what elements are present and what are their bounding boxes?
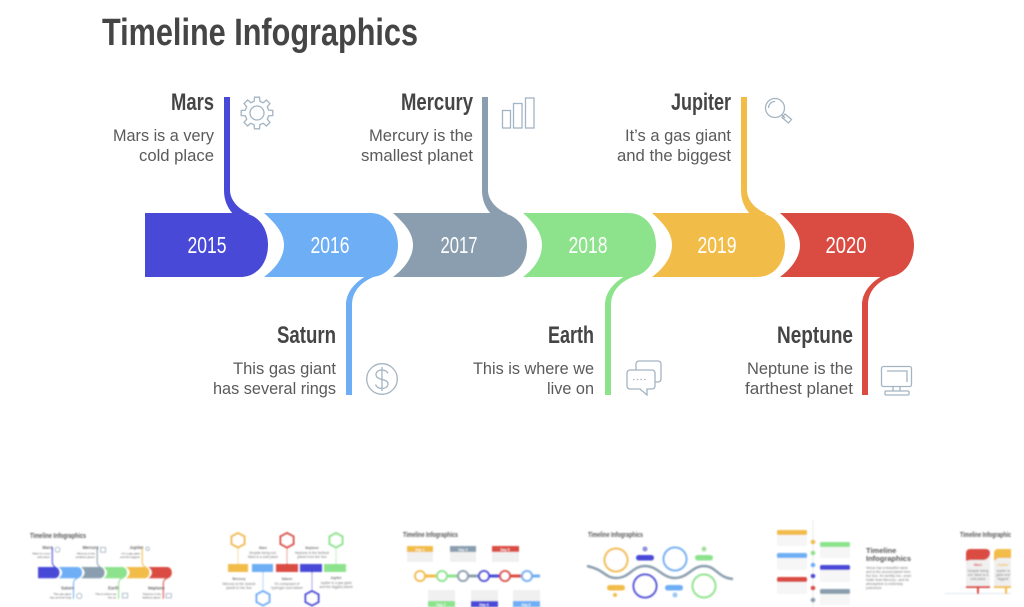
thumbnail 6 baseline	[945, 592, 1011, 594]
thumbnail 2 labels: Saturn	[282, 577, 292, 581]
icon: magnifier	[766, 98, 792, 123]
thumbnail 3 title: Timeline Infographics	[403, 530, 458, 539]
thumbnail 4: wave timeline	[587, 530, 733, 598]
thumbnail 4 title: Timeline Infographics	[588, 530, 643, 539]
thumbnail 2 labels: Mercury	[232, 577, 246, 581]
milestone: Neptune: Neptune	[777, 322, 853, 349]
thumbnail 3 day labels: Day 1	[415, 548, 425, 552]
thumbnail 1 ribbon: Neptune	[148, 586, 165, 591]
thumbnail 5 text: Infographics	[866, 554, 911, 563]
milestone: Mars: cold place	[139, 147, 214, 165]
milestone: Saturn: This gas giant	[233, 360, 336, 378]
segment 2017: 2017	[440, 232, 478, 258]
thumbnail 4 circles	[604, 548, 716, 598]
milestone: Earth	[473, 276, 661, 398]
thumbnail 5 text: Timeline	[866, 546, 896, 555]
thumbnail 1 ribbon	[32, 545, 172, 600]
thumbnail 3 day labels	[407, 546, 540, 607]
milestone: Neptune: farthest planet	[745, 380, 853, 398]
thumbnail 1 ribbon: smallest planet	[76, 555, 95, 559]
thumbnail 6 red card: cold place	[970, 577, 986, 581]
milestone: Mars	[113, 89, 273, 214]
thumbnail 1 ribbon: Mercury is the	[77, 552, 95, 556]
thumbnail 3 day labels: Day 6	[521, 603, 531, 607]
thumbnail 5 text: the Sun. It’s terribly hot—even	[866, 574, 911, 578]
thumbnail 3 day labels: Day 5	[500, 548, 510, 552]
thumbnail 6 red card	[966, 549, 990, 594]
thumbnail strip	[30, 520, 1011, 607]
thumbnail 2 labels: and the biggest planet	[319, 585, 353, 589]
thumbnail 1 ribbon: It’s a gas giant	[122, 552, 140, 556]
thumbnail 1 ribbon: Neptune is the	[143, 592, 162, 596]
thumbnail 2 labels: Neptune is the farthest	[295, 551, 329, 555]
thumbnail 1 ribbon: Mars is a very	[32, 552, 51, 556]
milestone: Neptune: Neptune is the	[747, 360, 853, 378]
icon: monitor	[882, 366, 912, 395]
thumbnail 3: day timeline	[403, 530, 540, 607]
thumbnail 5 cards	[777, 530, 850, 605]
thumbnail 2 labels: planet from the Sun	[297, 555, 327, 559]
timeline ribbon	[145, 213, 914, 277]
milestone: Mars: Mars	[171, 89, 214, 116]
thumbnail 6 red card: Mars	[974, 563, 982, 567]
segment 2017	[393, 213, 527, 277]
thumbnail 1 ribbon: Mars	[43, 545, 53, 550]
thumbnail 6 yellow card: biggest	[998, 577, 1009, 581]
milestone: Mars: Mars is a very	[113, 127, 215, 145]
segment 2016	[264, 213, 398, 277]
icon: gear	[241, 97, 273, 129]
thumbnail 1 title: Timeline Infographics	[30, 531, 86, 540]
thumbnail 2 labels: Mercury is the closest	[223, 582, 255, 586]
thumbnail 1 ribbon: Mercury	[83, 545, 99, 550]
thumbnail 2 labels	[223, 546, 353, 590]
thumbnail 5 text	[866, 546, 911, 590]
thumbnail 1 ribbon: has several rings	[50, 596, 72, 600]
thumbnail 2 labels: Neptune	[305, 546, 319, 550]
thumbnail 1 ribbon: Saturn	[61, 586, 75, 591]
thumbnail 5 text: poisonous	[866, 586, 882, 590]
milestone: Neptune	[745, 276, 912, 398]
milestone: Mercury: smallest planet	[361, 147, 473, 165]
thumbnail 5 axis	[812, 520, 814, 607]
thumbnail 1 ribbon: This gas giant	[53, 592, 71, 596]
thumbnail 2 year bars	[228, 564, 346, 572]
thumbnail 6 yellow card: Jupiter is	[996, 569, 1010, 573]
milestone: Mercury: Mercury is the	[369, 127, 473, 145]
thumbnail 2 connectors	[238, 547, 336, 591]
thumbnail 1 ribbon: Jupiter	[130, 545, 144, 550]
thumbnail 4 weeks	[607, 546, 713, 598]
thumbnail 2 labels: Jupiter is a gas giant	[320, 581, 352, 585]
thumbnail 1 ribbon: Earth	[108, 586, 119, 591]
thumbnail 2: hexagon timeline	[223, 533, 353, 606]
thumbnail 6 yellow card: giant and	[996, 573, 1010, 577]
segment 2019: 2019	[698, 232, 736, 258]
milestone: Saturn	[213, 276, 397, 398]
thumbnail 2 labels: Mars	[259, 546, 267, 550]
milestone: Mercury: Mercury	[401, 89, 474, 116]
thumbnail 1 ribbon: farthest planet	[142, 596, 161, 600]
thumbnail 2 labels: Despite being red,	[249, 551, 277, 555]
milestone: Earth: Earth	[548, 322, 594, 349]
thumbnail 5: vertical timeline	[777, 520, 911, 607]
thumbnail 1 ribbon: and the biggest	[120, 555, 140, 559]
thumbnail 4 wave	[587, 566, 733, 579]
thumbnail 2 labels: planet to the Sun	[226, 586, 252, 590]
thumbnail 5 text: hotter than Mercury—and its	[866, 578, 909, 582]
thumbnail 1: ribbon timeline	[30, 531, 172, 600]
thumbnail 6: cards timeline	[945, 530, 1011, 594]
milestone: Mercury	[361, 89, 534, 214]
title: Timeline Infographics	[102, 12, 418, 54]
segment 2020: 2020	[826, 232, 866, 258]
thumbnail 3 day labels: Day 4	[479, 603, 489, 607]
segment 2018: 2018	[568, 232, 608, 258]
thumbnail 1 ribbon: This is where we	[95, 592, 117, 596]
icon: chat bubbles	[627, 361, 661, 395]
milestone: Saturn: Saturn	[277, 322, 336, 349]
thumbnail 3 line and nodes	[415, 571, 540, 581]
thumbnail 3 top cards	[407, 552, 540, 601]
thumbnail 5 text: Venus has a beautiful name	[866, 566, 908, 570]
thumbnail 2 hexagons	[232, 533, 342, 606]
segment 2018	[523, 213, 656, 277]
thumbnail 2 labels: It’s composed of	[275, 582, 299, 586]
main slide	[102, 12, 914, 398]
milestone: Jupiter: Jupiter	[671, 89, 731, 116]
thumbnail 6 yellow card	[994, 549, 1011, 594]
thumbnail 5 text: atmosphere is extremely	[866, 582, 903, 586]
segment 2016: 2016	[310, 232, 350, 258]
thumbnail 6 yellow card: Jupiter	[997, 563, 1009, 567]
thumbnail 1 ribbon: live on	[108, 596, 117, 600]
icon: dollar	[367, 364, 397, 394]
segment 2015	[145, 213, 268, 277]
thumbnail 5 dots	[811, 540, 815, 602]
thumbnail 6 red card: red, Mars is a	[968, 573, 988, 577]
thumbnail 2 labels: Mars is a cold place	[248, 555, 278, 559]
segment 2015: 2015	[188, 232, 226, 258]
segment 2020	[780, 213, 914, 277]
milestone: Saturn: has several rings	[213, 380, 336, 398]
thumbnail 6 red card: Despite being	[968, 569, 988, 573]
milestone: Jupiter: It’s a gas giant	[625, 127, 731, 145]
thumbnail 2 labels: Jupiter	[330, 576, 342, 580]
thumbnail 3 day labels: Day 3	[458, 548, 468, 552]
thumbnail 5 text: and is the second planet from	[866, 570, 911, 574]
milestone: Jupiter	[617, 89, 792, 214]
thumbnail 1 ribbon: cold place	[37, 555, 50, 559]
thumbnail 3 day labels: Day 2	[436, 603, 446, 607]
icon: bar chart	[502, 98, 534, 128]
thumbnail 2 labels: hydrogen and helium	[271, 586, 303, 590]
milestone: Earth: This is where we	[473, 360, 594, 378]
segment 2019	[652, 213, 785, 277]
milestone: Jupiter: and the biggest	[617, 147, 731, 165]
milestone: Earth: live on	[547, 380, 594, 398]
